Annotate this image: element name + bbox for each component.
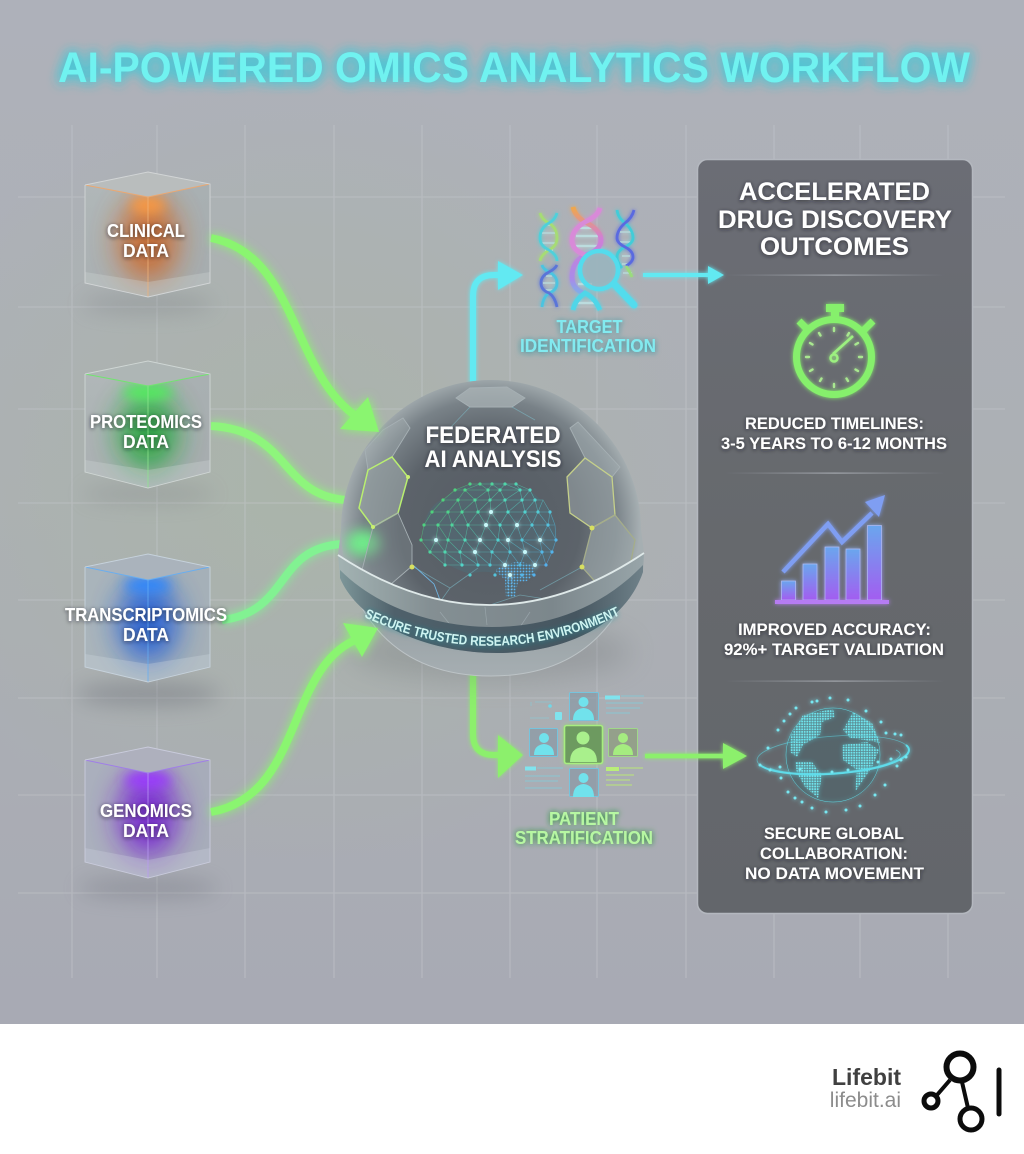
text: improved accuracy: IMPROVED ACCURACY: — [738, 621, 931, 639]
label: patient stratification: PATIENT — [549, 809, 619, 829]
text: improved accuracy — [724, 621, 944, 659]
icon: stopwatch — [796, 308, 873, 394]
cube: genomics data — [78, 747, 218, 898]
arrow: proteomics data to federated analysis — [211, 426, 346, 500]
text: reduced timelines: 3-5 YEARS TO 6-12 MONTHS — [721, 435, 947, 453]
heading: federated ai analysis: AI ANALYSIS — [424, 446, 562, 473]
panel: accelerated drug discovery outcomes — [698, 160, 972, 914]
base band text: SECURE TRUSTED RESEARCH ENVIRONMENT — [362, 606, 620, 649]
arrow: target identification to outcomes — [643, 266, 724, 284]
icon: neural network brain — [421, 482, 556, 597]
cube: transcriptomics data — [65, 554, 227, 706]
hexagon panels — [359, 387, 635, 587]
dome glass — [338, 380, 644, 605]
cube: transcriptomics data: TRANSCRIPTOMICS — [65, 605, 227, 625]
text: improved accuracy: 92%+ TARGET VALIDATION — [724, 641, 944, 659]
arrow: clinical data to federated analysis — [211, 238, 379, 432]
center patient card — [564, 726, 602, 764]
icon: digital globe — [757, 698, 909, 812]
arrow: patient stratification to outcomes — [645, 743, 747, 769]
left helix — [540, 213, 557, 307]
text: secure global collaboration: SECURE GLOBAL — [764, 825, 904, 843]
cube: clinical data: DATA — [123, 241, 169, 261]
panel heading: OUTCOMES — [760, 233, 909, 261]
label: patient stratification — [515, 809, 653, 848]
arrow: federated analysis to target identification — [473, 261, 523, 384]
cube: proteomics data — [82, 361, 214, 503]
text: secure global collaboration: NO DATA MOVEMENT — [745, 865, 924, 883]
text: reduced timelines: REDUCED TIMELINES: — [745, 415, 924, 433]
panel heading: DRUG DISCOVERY — [718, 206, 952, 234]
right helix — [617, 210, 634, 277]
cube: proteomics data: DATA — [123, 432, 169, 452]
heading: federated ai analysis: FEDERATED — [426, 422, 560, 449]
cube: clinical data: CLINICAL — [107, 221, 185, 241]
logo text: Lifebit — [832, 1064, 901, 1090]
magnifier — [580, 251, 618, 289]
arrow: transcriptomics data to federated analysis — [222, 544, 342, 620]
cube: genomics data: DATA — [123, 821, 169, 841]
panel background — [698, 160, 972, 914]
label: target identification: IDENTIFICATION — [520, 336, 656, 356]
icon: dna helices with magnifier — [540, 207, 634, 310]
panel: target identification — [520, 207, 656, 356]
cube: genomics data: GENOMICS — [100, 801, 192, 821]
dome: secure trusted research environment — [338, 380, 644, 690]
cube: transcriptomics data: DATA — [123, 625, 169, 645]
logo mark — [924, 1054, 999, 1130]
cyan and green patient cards — [530, 692, 638, 797]
footer: lifebit logo — [830, 1054, 999, 1130]
data readouts — [525, 696, 644, 788]
label: target identification — [520, 317, 656, 356]
arrow: genomics data to federated analysis — [211, 623, 378, 812]
middle helix — [572, 207, 601, 310]
dome base band — [340, 565, 643, 653]
logo text — [830, 1064, 901, 1112]
panel: patient stratification — [515, 692, 653, 848]
panel heading — [718, 178, 952, 261]
title: AI-POWERED OMICS ANALYTICS WORKFLOW — [58, 44, 970, 92]
dome base strip — [338, 553, 644, 653]
text: secure global collaboration — [745, 825, 924, 883]
icon: patient cards — [525, 692, 644, 797]
heading: federated ai analysis — [424, 422, 562, 473]
text: reduced timelines — [721, 415, 947, 453]
label: patient stratification: STRATIFICATION — [515, 828, 653, 848]
panel heading: ACCELERATED — [739, 178, 930, 206]
cube: clinical data — [82, 172, 214, 314]
arrow: federated analysis to patient stratification — [473, 660, 523, 778]
icon: rising bar chart — [775, 495, 889, 604]
cube: proteomics data: PROTEOMICS — [90, 412, 202, 432]
text: secure global collaboration: COLLABORATION: — [760, 845, 908, 863]
logo text: lifebit.ai — [830, 1089, 901, 1112]
label: target identification: TARGET — [556, 317, 622, 337]
dome lower hemisphere — [345, 570, 637, 676]
